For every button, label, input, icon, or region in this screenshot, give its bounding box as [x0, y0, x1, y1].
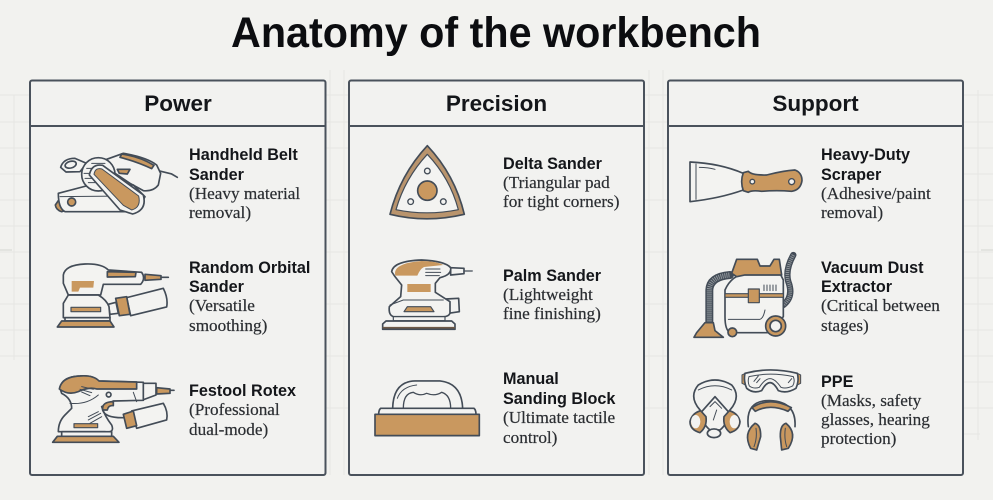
item: Handheld Belt Sander: removal) — [189, 203, 251, 222]
item: Heavy-Duty Scraper: (Adhesive/paint — [821, 184, 931, 203]
item: Heavy-Duty Scraper: Scraper — [821, 166, 882, 184]
icon: palm sander — [383, 260, 472, 329]
item: Manual Sanding Block: Manual — [503, 370, 559, 388]
item: Festool Rotex: (Professional — [189, 400, 280, 419]
item: Manual Sanding Block: (Ultimate tactile — [503, 408, 616, 427]
item: Vacuum Dust Extractor: Vacuum Dust — [821, 259, 924, 277]
icon: handheld belt sander — [55, 153, 177, 214]
icon: heavy-duty scraper — [690, 162, 802, 202]
item: PPE: PPE — [821, 373, 854, 391]
item: Random Orbital Sander: Random Orbital — [189, 259, 310, 277]
item: Vacuum Dust Extractor: (Critical between — [821, 296, 940, 315]
panel: Precision — [349, 80, 644, 475]
panel: Support — [668, 80, 963, 475]
icon: delta sander — [390, 146, 464, 219]
heading: Precision: Precision — [446, 91, 547, 116]
item: Random Orbital Sander: Sander — [189, 278, 245, 296]
icon: vacuum dust extractor — [694, 255, 793, 337]
heading: Support: Support — [772, 91, 859, 116]
icon: manual sanding block — [375, 381, 479, 436]
icon: Festool Rotex sander — [53, 376, 174, 442]
item: Festool Rotex: Festool Rotex — [189, 382, 296, 400]
item: Vacuum Dust Extractor: Extractor — [821, 278, 893, 296]
panel: Power — [30, 80, 326, 475]
item: Palm Sander: (Lightweight — [503, 285, 593, 304]
item: Heavy-Duty Scraper: removal) — [821, 203, 883, 222]
item: Random Orbital Sander: smoothing) — [189, 316, 267, 335]
item: Festool Rotex: dual-mode) — [189, 420, 268, 439]
item: Handheld Belt Sander: (Heavy material — [189, 184, 300, 203]
icon: random orbital sander — [57, 264, 168, 327]
item: Manual Sanding Block: control) — [503, 428, 557, 447]
item: PPE: protection) — [821, 429, 896, 448]
icon: PPE set — [690, 370, 801, 450]
title: Anatomy of the workbench — [231, 9, 761, 57]
item: Delta Sander: Delta Sander — [503, 155, 603, 173]
item: Delta Sander: for tight corners) — [503, 192, 619, 211]
item: Heavy-Duty Scraper: Heavy-Duty — [821, 146, 910, 164]
item: PPE: (Masks, safety — [821, 391, 922, 410]
item: Random Orbital Sander: (Versatile — [189, 296, 255, 315]
item: Handheld Belt Sander: Handheld Belt — [189, 146, 298, 164]
item: Handheld Belt Sander: Sander — [189, 166, 245, 184]
item: PPE: glasses, hearing — [821, 410, 930, 429]
item: Delta Sander: (Triangular pad — [503, 173, 610, 192]
item: Manual Sanding Block: Sanding Block — [503, 390, 616, 408]
heading: Power: Power — [144, 91, 212, 116]
item: Palm Sander: fine finishing) — [503, 304, 601, 323]
item: Palm Sander: Palm Sander — [503, 267, 602, 285]
item: Vacuum Dust Extractor: stages) — [821, 316, 869, 335]
